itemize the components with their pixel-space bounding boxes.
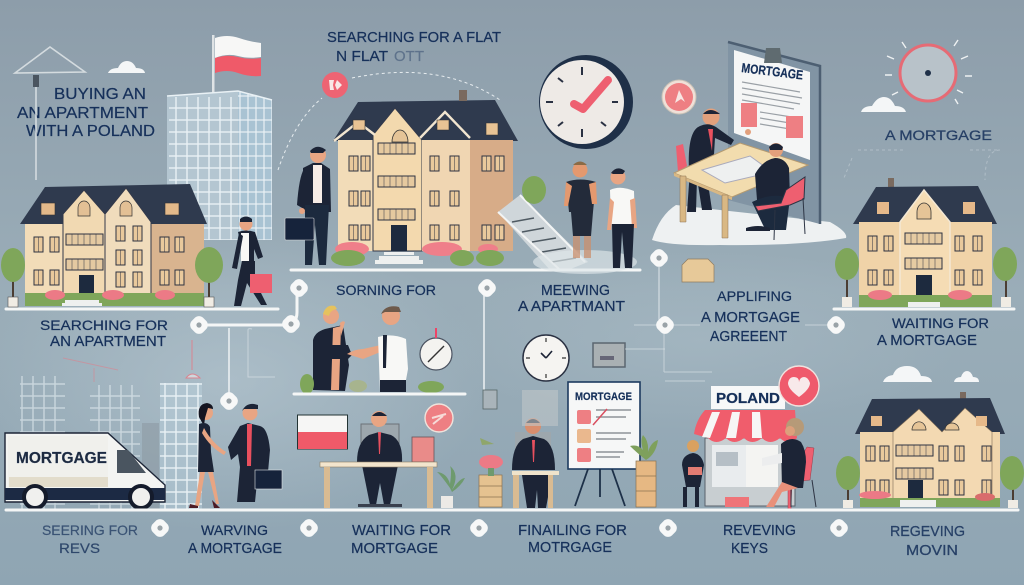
- man at desk: [357, 411, 434, 507]
- timeline pins: [149, 517, 850, 539]
- person: viewer right: [607, 168, 637, 268]
- woman on chair: [762, 418, 816, 509]
- plant on drawers: [630, 435, 658, 507]
- text: waiting for: WAITING FOR: [892, 315, 989, 331]
- text: searching for an apartment: SEARCHING FOR: [40, 317, 168, 333]
- polish flag panel: [298, 415, 348, 449]
- person: viewer left: [564, 162, 597, 258]
- ring timer: [885, 40, 972, 104]
- icon: heart badge: [779, 366, 819, 406]
- couple shaking hands: [189, 403, 282, 508]
- heading: searching for a flat: OTT: [394, 49, 424, 65]
- text: a mortgage: A MORTGAGE: [885, 127, 992, 143]
- tower: lower left: [160, 340, 202, 510]
- caption: receiving keys: REVEVING: [723, 523, 796, 539]
- person walking with red bag: [232, 216, 272, 306]
- icon: pink circle badge: [662, 80, 696, 114]
- text: viewing: MEEWING: [541, 283, 610, 299]
- mortgage document board: MORTGAGE: [741, 60, 804, 83]
- heading: searching for a flat: SEARCHING FOR A FLAT: [327, 30, 501, 46]
- title: buying an apartment: BUYING AN: [54, 86, 146, 103]
- caption: receiving keys: KEYS: [731, 541, 768, 557]
- caption: moving in: MOVIN: [906, 543, 958, 559]
- connector: left route: [188, 277, 310, 412]
- caption: finalising mortgage: MOTRGAGE: [528, 540, 612, 556]
- red seal badge: [425, 404, 453, 432]
- connectors: upper right pins: [634, 314, 847, 381]
- faint connector: right: [844, 150, 1000, 180]
- main ground line: [6, 508, 1018, 512]
- chair: advisor: [676, 144, 687, 172]
- caption: waiting for mortgage: WAITING FOR: [352, 522, 451, 539]
- text: applying: [701, 288, 800, 345]
- mortgage checklist board: MORTGAGE: [575, 391, 632, 403]
- clock with red check: [539, 55, 633, 149]
- caption: moving in: [890, 524, 965, 559]
- text: sorting for: SORNING FOR: [336, 282, 436, 298]
- cloud: lower right A: [883, 366, 932, 382]
- caption: seeing for keys: SEERING FOR: [42, 522, 138, 538]
- shop: poland: POLAND: [716, 391, 780, 407]
- title: buying an apartment: WITH A POLAND: [26, 123, 155, 140]
- text: applying: AGREEENT: [710, 328, 787, 345]
- person with briefcase: [285, 147, 331, 265]
- delivery van: MORTGAGE: [16, 450, 107, 467]
- small wall clock: [420, 328, 452, 370]
- ground line: left: [6, 308, 278, 310]
- house: lower right: [855, 392, 1005, 507]
- floor glow: viewing: [533, 250, 637, 274]
- handshake scene: [300, 306, 444, 394]
- shop: poland: [694, 386, 797, 507]
- platform: handshake: [294, 392, 465, 396]
- child at shop: [682, 440, 704, 507]
- faint skyline: [20, 358, 159, 510]
- caption: waiting a mortgage: [188, 522, 282, 557]
- caption: seeing for keys: [42, 522, 138, 556]
- cloud: lower right B: [954, 371, 979, 382]
- tower building: [167, 91, 272, 240]
- heading: searching for a flat: [327, 30, 501, 65]
- person: advisor: [687, 108, 751, 212]
- text: applying: APPLIFING: [717, 288, 792, 304]
- heading: searching for a flat: N FLAT: [336, 49, 388, 65]
- wall clock: [523, 335, 569, 381]
- cloud: right: [861, 97, 906, 112]
- text: viewing: A APARTMANT: [518, 299, 625, 315]
- text: waiting for: A MORTGAGE: [877, 333, 977, 349]
- cloud: top left: [108, 61, 145, 73]
- man at desk: finalising: [512, 418, 559, 508]
- platform: middle: [291, 268, 640, 272]
- text: viewing: [518, 283, 625, 315]
- tree: right A: [835, 248, 859, 307]
- mortgage document board: [728, 42, 820, 224]
- text: searching for an apartment: [40, 317, 168, 350]
- caption: seeing for keys: REVS: [59, 540, 100, 556]
- dashed route arc: [278, 72, 500, 170]
- flowers on drawers: [479, 438, 503, 507]
- text: waiting for: [877, 315, 989, 349]
- pin with line and parcel: [648, 247, 714, 325]
- text: searching for an apartment: AN APARTMENT: [50, 334, 166, 350]
- title: buying an apartment: [17, 86, 155, 140]
- chair: client: [755, 177, 805, 240]
- mortgage checklist board: [568, 382, 640, 506]
- house: right: [853, 178, 997, 307]
- title: buying an apartment: AN APARTMENT: [17, 105, 148, 122]
- text: applying: A MORTGAGE: [701, 309, 800, 326]
- caption: waiting for mortgage: [351, 522, 451, 557]
- floor glow: mortgage meeting: [652, 205, 846, 245]
- caption: waiting a mortgage: A MORTGAGE: [188, 541, 282, 557]
- caption: waiting for mortgage: MORTGAGE: [351, 540, 438, 557]
- polish flag on tower: [212, 35, 261, 93]
- staircase: [498, 176, 588, 270]
- caption: finalising mortgage: FINAILING FOR: [518, 522, 627, 539]
- tree: left B: [195, 247, 223, 307]
- plant: small: [437, 466, 465, 508]
- caption: moving in: REGEVING: [890, 524, 965, 540]
- small framed picture: [593, 343, 665, 367]
- desk: [674, 143, 808, 238]
- tree: lower right A: [836, 456, 860, 508]
- connector: middle route: [476, 277, 498, 409]
- ground line: right: [834, 308, 1014, 310]
- delivery van: [5, 433, 165, 508]
- tree: right B: [993, 247, 1017, 307]
- tree: lower right B: [1000, 456, 1024, 508]
- house: left: [20, 184, 207, 306]
- house: middle: [331, 90, 518, 266]
- faint poster: [522, 390, 558, 426]
- icon: red badge: [322, 72, 348, 98]
- person: client: [746, 143, 790, 231]
- caption: finalising mortgage: [518, 522, 627, 556]
- caption: waiting a mortgage: WARVING: [201, 522, 268, 538]
- crane: [15, 47, 85, 180]
- caption: receiving keys: [723, 523, 796, 557]
- desk: man: [320, 462, 437, 508]
- tree: left A: [1, 248, 25, 307]
